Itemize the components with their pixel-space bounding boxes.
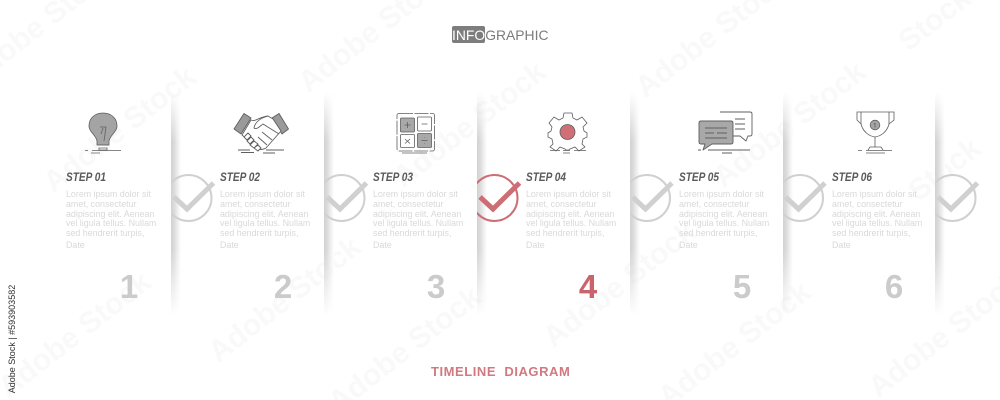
step 2 text: adipiscing elit. Aenean	[220, 209, 308, 219]
step 4 text: amet, consectetur	[526, 199, 597, 209]
step 1 text: adipiscing elit. Aenean	[66, 209, 154, 219]
check 1	[166, 175, 214, 221]
step 6 text: sed hendrerit turpis,	[832, 228, 910, 238]
step 5 text: vel ligula tellus. Nullam	[679, 218, 769, 228]
step 5 text: amet, consectetur	[679, 199, 750, 209]
step 4 text: Date	[526, 240, 545, 250]
check 2	[318, 175, 366, 221]
step 1 text	[66, 170, 156, 250]
step 1 text: STEP 01	[66, 170, 106, 184]
step 2 text: Lorem ipsum dolor sit	[220, 189, 305, 199]
number 4: 4	[579, 268, 597, 305]
step 2 text	[220, 170, 310, 250]
check marks	[174, 174, 980, 222]
step 6 text: Lorem ipsum dolor sit	[832, 189, 917, 199]
step 1 text: vel ligula tellus. Nullam	[66, 218, 156, 228]
step 6 text: amet, consectetur	[832, 199, 903, 209]
text: Adobe Stock	[202, 230, 367, 369]
step 6 text: STEP 06	[832, 170, 872, 184]
step 1 text: Date	[66, 240, 85, 250]
check 3	[472, 175, 520, 221]
footer heading: TIMELINE DIAGRAM	[431, 364, 570, 379]
text: Adobe Stock	[37, 60, 202, 199]
step 2 text: sed hendrerit turpis,	[220, 228, 298, 238]
title: INFO	[452, 27, 485, 43]
step 3 text: STEP 03	[373, 170, 413, 184]
step 3 text: adipiscing elit. Aenean	[373, 209, 461, 219]
step 5 text: sed hendrerit turpis,	[679, 228, 757, 238]
step 5 text: adipiscing elit. Aenean	[679, 209, 767, 219]
step 2 text: amet, consectetur	[220, 199, 291, 209]
vertical credit: Adobe Stock | #593903582	[7, 285, 17, 393]
step 6 text: vel ligula tellus. Nullam	[832, 218, 922, 228]
step 3 text	[373, 170, 463, 250]
step 1 text: amet, consectetur	[66, 199, 137, 209]
text: Adobe Stock	[707, 55, 872, 194]
step 3 text: amet, consectetur	[373, 199, 444, 209]
title	[452, 26, 548, 43]
step 4 text: adipiscing elit. Aenean	[526, 209, 614, 219]
check 6	[930, 175, 978, 221]
step 4 text: Lorem ipsum dolor sit	[526, 189, 611, 199]
step 5 text	[679, 170, 769, 250]
step 1 text: Lorem ipsum dolor sit	[66, 189, 151, 199]
number 6: 6	[885, 268, 903, 305]
step 5 text: STEP 05	[679, 170, 719, 184]
step 6 text: Date	[832, 240, 851, 250]
step 3 text: Date	[373, 240, 392, 250]
step 3 text: sed hendrerit turpis,	[373, 228, 451, 238]
number 1: 1	[120, 268, 138, 305]
step 1 text: sed hendrerit turpis,	[66, 228, 144, 238]
step 2 text: STEP 02	[220, 170, 260, 184]
step 4 text: vel ligula tellus. Nullam	[526, 218, 616, 228]
title: GRAPHIC	[485, 27, 548, 43]
step 3 text: vel ligula tellus. Nullam	[373, 218, 463, 228]
number 2: 2	[274, 268, 292, 305]
step 6 text: adipiscing elit. Aenean	[832, 209, 920, 219]
step 5 text: Lorem ipsum dolor sit	[679, 189, 764, 199]
step 6 text	[832, 170, 922, 250]
check 5	[777, 175, 825, 221]
number 3: 3	[427, 268, 445, 305]
text: Adobe Stock	[387, 55, 552, 194]
step 2 text: Date	[220, 240, 239, 250]
number 5: 5	[733, 268, 751, 305]
step 4 text: STEP 04	[526, 170, 566, 184]
step 4 text	[526, 170, 616, 250]
text: Stock	[902, 131, 987, 208]
step 5 text: Date	[679, 240, 698, 250]
step 3 text: Lorem ipsum dolor sit	[373, 189, 458, 199]
text: Adobe Stock	[537, 215, 702, 354]
step 2 text: vel ligula tellus. Nullam	[220, 218, 310, 228]
check 4	[624, 175, 672, 221]
step 4 text: sed hendrerit turpis,	[526, 228, 604, 238]
